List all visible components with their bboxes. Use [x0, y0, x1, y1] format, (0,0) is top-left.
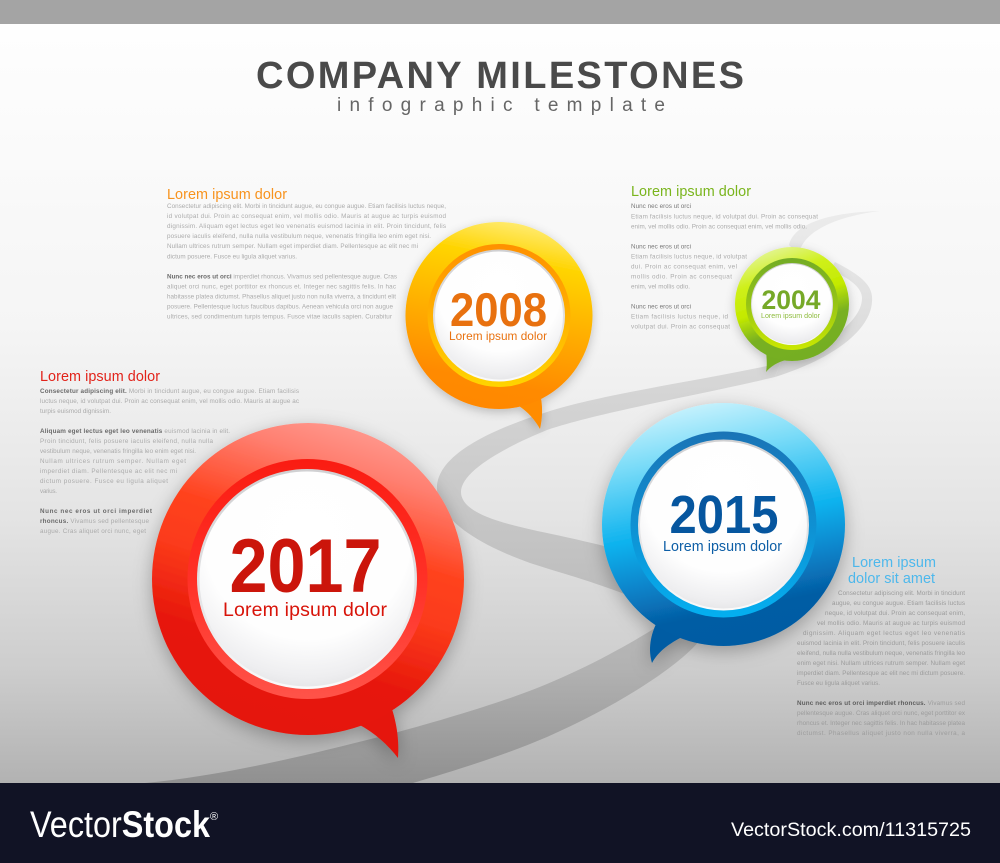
road [145, 211, 880, 783]
body text: 2008 [167, 203, 446, 320]
body text: 2008: aliquet orci nunc, eget porttitor ex rhoncus et. Integer nec sagittis felis. In hac [167, 284, 396, 290]
body text: 2004: enim, vel mollis odio. [631, 284, 690, 290]
body text: 2008: dignissim. Aliquam eget lectus eget leo venenatis euismod lacinia in elit. Proin tincidunt, felis [167, 223, 446, 230]
body text: 2015: imperdiet diam. Pellentesque ac elit nec mi dictum posuere. [797, 670, 965, 677]
body text: 2015: Nunc nec eros ut orci imperdiet rhoncus. Vivamus sed [797, 700, 965, 707]
body text: 2008: posuere. Pellentesque luctus faucibus dapibus. Aenean vehicula orci non augue [167, 304, 393, 310]
body text: 2017: turpis euismod dignissim. [40, 408, 111, 415]
body text: 2008: dictum posuere. Fusce eu ligula aliquet varius. [167, 254, 297, 260]
body text: 2017: Nunc nec eros ut orci imperdiet [40, 508, 153, 515]
caption: 2017: Lorem ipsum dolor [223, 599, 388, 621]
title: COMPANY MILESTONES [256, 55, 744, 97]
body text: 2008: id volutpat dui. Proin ac consequat enim, vel mollis odio. Mauris at augue ac turpis euismod [167, 213, 446, 220]
body text: 2004: volutpat dui. Proin ac consequat [631, 324, 730, 330]
body text: 2017: varius. [40, 488, 57, 495]
pin body: 2015 [602, 403, 845, 663]
body text: 2017: imperdiet diam. Pellentesque ac elit nec mi [40, 468, 177, 475]
logo mark: registered: ® [210, 811, 218, 823]
body text: 2015: Fusce eu ligula aliquet varius. [797, 680, 880, 687]
body text: 2004: enim, vel mollis odio. Proin ac consequat enim, vel mollis odio. [631, 224, 807, 230]
body text: 2017: Consectetur adipiscing elit. Morbi in tincidunt augue, eu congue augue. Etiam facilisis [40, 388, 299, 395]
body text: 2015: augue, eu congue augue. Etiam facilisis luctus [832, 600, 965, 607]
body text: 2004: dui. Proin ac consequat enim, vel [631, 264, 737, 270]
pin: 2017 [152, 423, 464, 758]
panel: 2004 text [631, 184, 818, 330]
pin body: 2004 [735, 247, 849, 372]
body text: 2017: augue. Cras aliquet orci nunc, eget [40, 528, 146, 535]
panel: 2017 text [40, 369, 299, 535]
pin body: 2017 [152, 423, 464, 758]
pin: 2004 [735, 247, 849, 372]
body text: 2015: enim eget nisi. Nullam ultrices rutrum semper. Nullam eget [797, 660, 965, 667]
year: 2008: 2008 [450, 283, 547, 336]
pin: 2008 [406, 222, 592, 429]
top bar [0, 0, 1000, 24]
body text: 2008: habitasse platea dictumst. Phasellus aliquet justo non nulla viverra, a tincidunt elit [167, 294, 396, 300]
body text: 2004: mollis odio. Proin ac consequat [631, 274, 732, 280]
body text: 2017 [40, 388, 299, 535]
pin: 2015 [602, 403, 845, 663]
body text: 2004: Etiam facilisis luctus neque, id volutpat dui. Proin ac consequat [631, 214, 818, 220]
body text: 2017: dictum posuere. Fusce eu ligula aliquet [40, 478, 168, 485]
subtitle: infographic template [337, 95, 665, 116]
year: 2017: 2017 [230, 524, 382, 609]
heading: 2015: Lorem ipsum [852, 555, 936, 571]
caption: 2008: Lorem ipsum dolor [449, 329, 547, 343]
body text: 2004 [631, 203, 818, 330]
body text: 2004: Nunc nec eros ut orci [631, 304, 691, 310]
body text: 2008: Nullam ultrices rutrum semper. Nullam eget imperdiet diam. Pellentesque ac elit nec mi [167, 243, 418, 250]
body text: 2015: euismod lacinia in elit. Proin tincidunt, felis posuere iaculis [797, 640, 965, 647]
body text: 2015: rhoncus et. Integer nec sagittis felis. In hac habitasse platea [797, 720, 965, 727]
body text: 2008: ultrices, sed condimentum turpis tempus. Fusce vitae iaculis sapien. Curabitur [167, 314, 392, 320]
body text: 2017: Nullam ultrices rutrum semper. Nullam eget [40, 458, 186, 465]
body text: 2004: Nunc nec eros ut orci [631, 203, 691, 210]
body text: 2017: vestibulum neque, venenatis fringilla leo enim eget nisi. [40, 448, 196, 455]
caption: 2004: Lorem ipsum dolor [761, 312, 821, 320]
image id: VectorStock.com/11315725 [731, 820, 971, 841]
body text: 2008: Consectetur adipiscing elit. Morbi in tincidunt augue, eu congue augue. Etiam facilisis luctus neque, [167, 203, 446, 210]
footer bar [0, 783, 1000, 863]
body text: 2015: Consectetur adipiscing elit. Morbi in tincidunt [838, 590, 965, 597]
panel: 2008 text [167, 187, 446, 320]
body text: 2015: pellentesque augue. Cras aliquet orci nunc, eget porttitor ex [797, 710, 966, 717]
body text: 2017: Aliquam eget lectus eget leo venenatis euismod lacinia in elit. [40, 428, 230, 435]
logo: VectorStock: VectorStock [30, 804, 210, 845]
body text: 2015: dictumst. Phasellus aliquet justo non nulla viverra, a [797, 730, 965, 737]
body text: 2004: Nunc nec eros ut orci [631, 244, 691, 250]
body text: 2004: Etiam facilisis luctus neque, id [631, 314, 728, 320]
caption: 2015: Lorem ipsum dolor [663, 539, 782, 555]
heading: 2004: Lorem ipsum dolor [631, 184, 751, 200]
heading: 2015: dolor sit amet [848, 571, 935, 587]
year: 2004: 2004 [762, 285, 820, 315]
body text: 2017: luctus neque, id volutpat dui. Proin ac consequat enim, vel mollis odio. Mauris at augue ac [40, 398, 299, 405]
body text: 2015 [797, 590, 966, 737]
body text: 2017: Proin tincidunt, felis posuere iaculis eleifend, nulla nulla [40, 438, 213, 445]
heading: 2017: Lorem ipsum dolor [40, 369, 160, 385]
panel: 2015 text [797, 555, 966, 737]
year: 2015: 2015 [670, 485, 778, 545]
pin body: 2008 [406, 222, 592, 429]
body text: 2008: posuere iaculis eleifend, nulla nulla vestibulum neque, venenatis fringilla leo enim eget nisi. [167, 233, 431, 240]
heading: 2015 [848, 555, 936, 587]
heading: 2008: Lorem ipsum dolor [167, 187, 287, 203]
body text: 2015: neque, id volutpat dui. Proin ac consequat enim, [825, 610, 965, 617]
body text: 2008: Nunc nec eros ut orci imperdiet rhoncus. Vivamus sed pellentesque augue. Cras [167, 274, 397, 280]
body text: 2017: rhoncus. Vivamus sed pellentesque [40, 518, 149, 525]
body text: 2015: vel mollis odio. Mauris at augue ac turpis euismod [817, 620, 965, 627]
body text: 2004: Etiam facilisis luctus neque, id volutpat [631, 254, 747, 260]
body text: 2015: eleifend, nulla nulla vestibulum neque, venenatis fringilla leo [797, 650, 965, 657]
body text: 2015: dignissim. Aliquam eget lectus eget leo venenatis [803, 630, 965, 637]
